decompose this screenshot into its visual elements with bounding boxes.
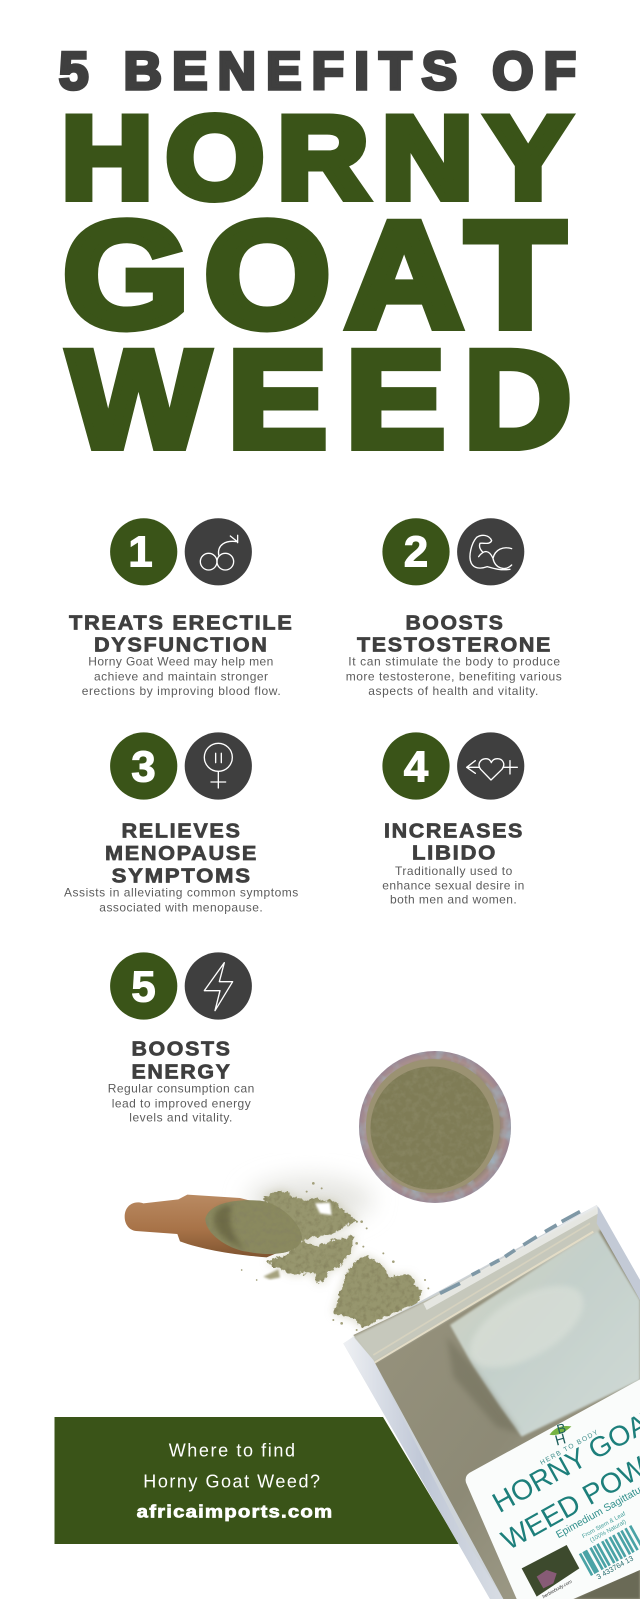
benefit description: Horny Goat Weed may help men: [88, 655, 273, 669]
number badge 1: 1: [128, 528, 153, 577]
benefit title: MENOPAUSE: [105, 843, 258, 865]
benefit description: Regular consumption can: [108, 1082, 254, 1096]
benefit 3: [64, 732, 298, 915]
benefit title: BOOSTS: [406, 612, 504, 634]
benefit 1: [69, 518, 294, 698]
benefit title: [69, 612, 294, 657]
bag label: From Stem & Leaf: [581, 1511, 627, 1540]
benefit title: [384, 820, 524, 864]
number badge 4: [382, 732, 450, 800]
icon: testicles with arrow: [185, 518, 252, 585]
banner text: [137, 1441, 333, 1521]
benefit title: [132, 1039, 232, 1083]
banner: where to find: [54, 1417, 459, 1544]
icon: flexed bicep: [457, 518, 524, 585]
banner text: Horny Goat Weed?: [143, 1471, 320, 1491]
number badge 3: 3: [131, 742, 156, 792]
benefit title: DYSFUNCTION: [94, 635, 268, 657]
benefit description: erections by improving blood flow.: [82, 684, 281, 698]
heading: weed: WEED: [68, 323, 590, 477]
benefit title: SYMPTOMS: [112, 865, 252, 887]
icon: lightning bolt: [185, 952, 252, 1020]
photo: bowl of powder: [359, 1051, 511, 1203]
benefit description: Traditionally used to: [395, 864, 513, 878]
number badge 2: [382, 518, 450, 585]
heading: goat: GOAT: [63, 190, 580, 358]
benefit title: TESTOSTERONE: [357, 635, 552, 657]
benefit title: RELIEVES: [122, 820, 242, 842]
photo: product bag: [343, 1205, 640, 1599]
number badge 4: 4: [404, 742, 429, 792]
bag label: 3 433764 13: [595, 1554, 635, 1581]
benefit title: INCREASES: [384, 820, 524, 842]
banner text: africaimports.com: [137, 1501, 333, 1521]
benefit description: [382, 864, 524, 906]
benefit title: ENERGY: [132, 1061, 232, 1083]
benefit description: more testosterone, benefiting various: [346, 670, 562, 684]
benefit description: levels and vitality.: [129, 1111, 232, 1125]
benefit description: It can stimulate the body to produce: [348, 655, 560, 669]
bag label: HERB TO BODY: [539, 1429, 600, 1467]
benefit description: [346, 655, 562, 698]
benefit title: BOOSTS: [132, 1039, 232, 1061]
number badge 2: 2: [404, 528, 428, 577]
benefit title: LIBIDO: [412, 842, 497, 864]
benefit description: enhance sexual desire in: [382, 878, 524, 892]
bag label: H: [553, 1431, 568, 1449]
heading: 5 benefits of: 5 BENEFITS OF: [59, 42, 576, 101]
bag label: B: [555, 1420, 568, 1437]
benefit description: both men and women.: [390, 892, 517, 906]
benefit description: aspects of health and vitality.: [368, 684, 538, 698]
heading: horny: HORNY: [61, 92, 583, 223]
benefit description: [108, 1082, 254, 1125]
benefit description: lead to improved energy: [112, 1096, 251, 1110]
benefit title: TREATS ERECTILE: [69, 612, 294, 634]
bag label: (100% Natural): [589, 1519, 627, 1544]
banner text: Where to find: [169, 1441, 295, 1461]
bag label: herbtobody.com: [541, 1579, 573, 1599]
benefit title: [105, 820, 258, 887]
benefit title: [357, 612, 552, 657]
benefit 4: [382, 732, 524, 906]
benefit description: [64, 886, 298, 915]
icon: female symbol with pause: [185, 732, 252, 800]
benefit description: [82, 655, 281, 698]
number badge 1: [110, 518, 177, 585]
photo: scoop with spilled powder: [125, 1177, 429, 1331]
title: [59, 42, 590, 477]
benefit description: Assists in alleviating common symptoms: [64, 886, 298, 900]
benefit 5: [108, 952, 254, 1125]
bag label: [466, 1379, 640, 1599]
number badge 5: [110, 952, 177, 1020]
icon: heart with arrow and plus: [457, 732, 524, 800]
benefit 2: [346, 518, 562, 698]
number badge 3: [110, 732, 177, 800]
benefit description: associated with menopause.: [99, 901, 263, 915]
number badge 5: 5: [131, 962, 156, 1012]
benefit description: achieve and maintain stronger: [94, 670, 268, 684]
